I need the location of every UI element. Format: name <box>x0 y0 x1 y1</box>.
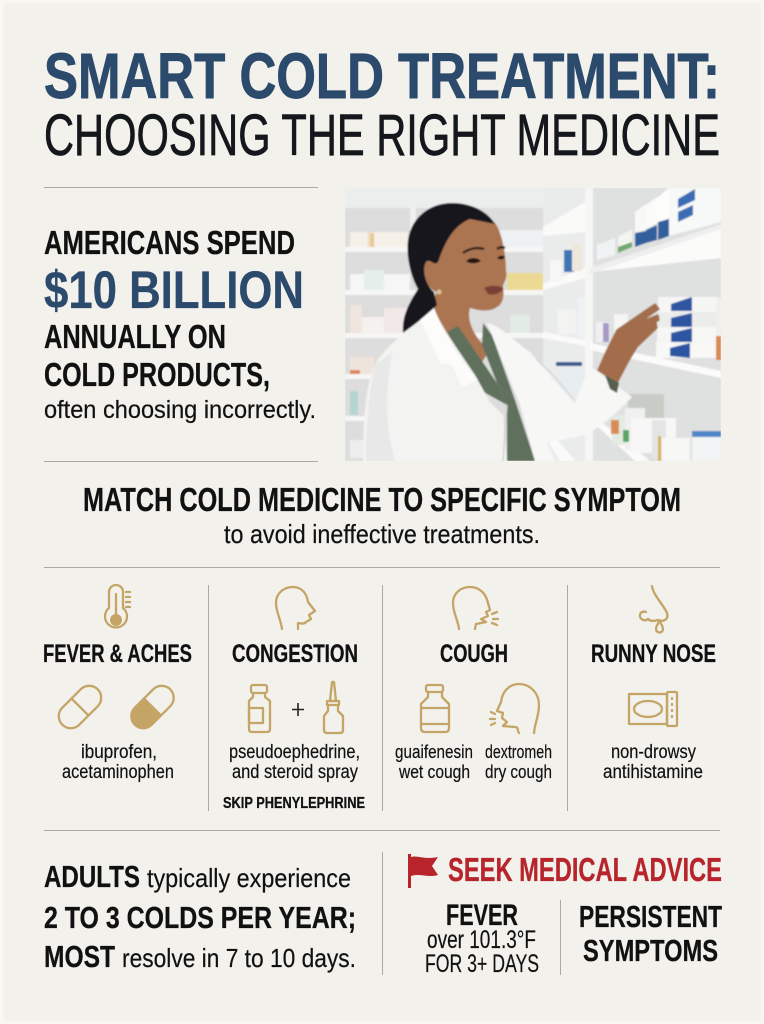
text: runny nose medicine: non-drowsy <box>611 742 696 763</box>
text: fever medicines: ibuprofen, <box>81 742 157 763</box>
main message heading: to avoid ineffective treatments. <box>224 519 540 549</box>
boxes on lower shelf <box>611 394 721 461</box>
woman: white lab coat <box>363 308 507 461</box>
warning: fever: FEVER <box>446 899 518 932</box>
panel: cough <box>395 587 552 782</box>
middle narrow shelving <box>543 188 587 461</box>
panel: seek medical advice <box>408 851 722 978</box>
stack of blue boxes <box>596 297 721 360</box>
callout: annual spending: $10 BILLION <box>44 261 304 320</box>
icon: head facing left coughing <box>490 684 539 733</box>
panel: runny nose <box>591 586 716 783</box>
icon: nasal spray <box>324 682 343 733</box>
warning: persistent symptoms <box>579 899 722 968</box>
callout: annual spending <box>44 224 316 424</box>
icon: nose with drop <box>640 586 667 632</box>
left shelving <box>345 188 543 461</box>
text block: cold frequency and duration: typically experience <box>147 863 351 893</box>
heading: cough: COUGH <box>440 640 508 668</box>
callout: annual spending: AMERICANS SPEND <box>44 224 295 261</box>
right shelving <box>585 188 721 461</box>
text block: cold frequency and duration: MOST <box>44 939 115 974</box>
text: congestion medicines: pseudoephedrine, <box>229 742 360 763</box>
text: runny nose medicine <box>603 742 703 783</box>
plus sign <box>292 703 304 716</box>
icon: head coughing <box>453 587 498 629</box>
callout: annual spending: often choosing incorrectly. <box>44 396 316 424</box>
text: cough medicines: guaifenesin <box>395 741 473 762</box>
text: fever medicines <box>62 742 174 783</box>
warning: fever: over 101.3°F <box>427 926 536 954</box>
boxes on top shelf <box>597 188 721 260</box>
heading: congestion: CONGESTION <box>232 640 358 668</box>
panel: congestion <box>223 587 365 812</box>
warning: skip phenylephrine: SKIP PHENYLEPHRINE <box>223 795 365 812</box>
woman: green blouse <box>447 323 535 461</box>
text: fever medicines: acetaminophen <box>62 762 174 783</box>
text: congestion medicines <box>229 742 360 783</box>
icon: head with blocked nose <box>276 587 315 629</box>
icon: two-tone tablet <box>54 681 106 733</box>
text block: cold frequency and duration: ADULTS <box>44 859 140 894</box>
text: cough medicines: dry cough <box>485 761 552 782</box>
callout: annual spending: ANNUALLY ON <box>44 318 226 355</box>
heading: runny nose: RUNNY NOSE <box>591 640 716 668</box>
warning: persistent symptoms: SYMPTOMS <box>583 933 718 968</box>
text: congestion medicines: and steroid spray <box>232 762 358 783</box>
warning: fever <box>425 899 539 978</box>
photo: pharmacist reaching for a box on a pharmacy shelf <box>345 188 721 461</box>
main message heading <box>83 481 681 549</box>
text: cough medicines <box>395 741 552 782</box>
text: cough medicines: wet cough <box>398 761 470 782</box>
text block: cold frequency and duration: resolve in 7 to 10 days. <box>122 943 356 973</box>
text: cough medicines: dextromeh <box>485 741 552 762</box>
woman: ponytail and hair <box>403 203 495 333</box>
text: runny nose medicine: antihistamine <box>603 762 703 783</box>
icon: capsule half filled <box>126 681 179 733</box>
icon: red flag <box>408 854 438 888</box>
woman: face and neck <box>422 218 508 362</box>
icon: pill bottle <box>249 685 270 732</box>
infographic canvas <box>44 52 722 975</box>
panel: fever and aches <box>43 585 192 783</box>
title <box>44 40 720 168</box>
heading: fever and aches: FEVER & ACHES <box>43 640 192 668</box>
text block: cold frequency and duration: 2 TO 3 COLDS PER YEAR; <box>44 900 356 935</box>
warning: fever: FOR 3+ DAYS <box>425 950 539 978</box>
text block: cold frequency and duration <box>44 859 356 974</box>
woman: raised hand <box>598 304 659 383</box>
callout: annual spending: COLD PRODUCTS, <box>44 356 270 393</box>
icon: syrup bottle <box>421 685 449 732</box>
woman: facial features <box>436 247 505 295</box>
icon: antihistamine blister pack <box>629 692 677 726</box>
icon: thermometer <box>105 585 130 627</box>
